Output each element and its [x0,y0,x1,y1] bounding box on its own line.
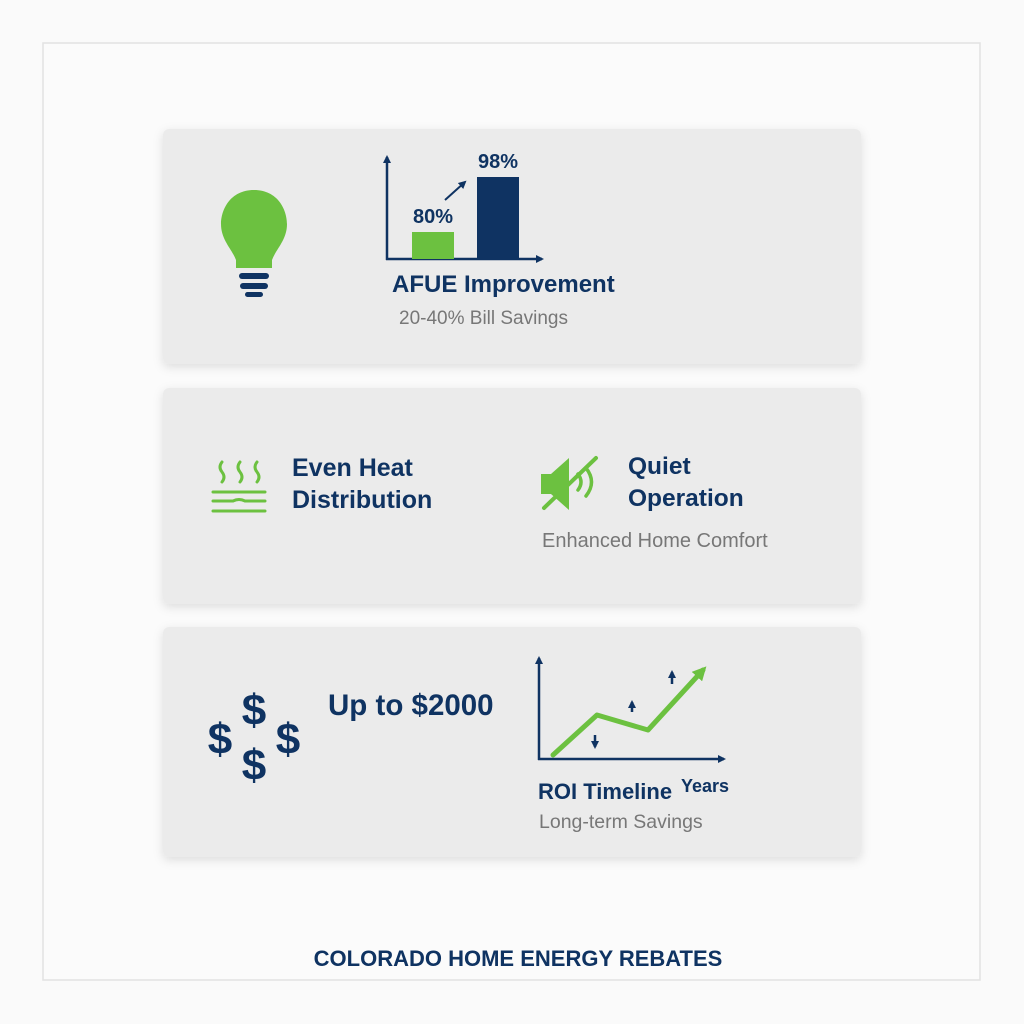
panel: rebates and ROI [163,627,861,857]
panel: comfort [163,388,861,604]
icon: dollar signs [208,686,300,790]
text: enhanced home comfort: Enhanced Home Comfort [542,530,768,552]
heading: Quiet Operation: Quiet [628,453,691,480]
icon: light bulb [221,190,287,297]
text: bill savings: 20-40% Bill Savings [399,308,568,329]
text: long-term savings: Long-term Savings [539,811,703,833]
line chart: ROI timeline [538,658,724,760]
heading: AFUE Improvement: AFUE Improvement [392,271,615,298]
heading: Quiet Operation: Operation [628,485,744,512]
icon: dollar signs: $ [242,741,266,790]
heading: Even Heat Distribution: Distribution [292,486,432,514]
icon: heat waves [213,462,265,511]
icon: muted speaker [541,458,596,510]
panel: AFUE efficiency [163,129,861,364]
icon: dollar signs: $ [242,686,266,735]
icon: dollar signs: $ [208,715,232,764]
heading: Even Heat Distribution: Even Heat [292,454,414,482]
heading: ROI Timeline: ROI Timeline [538,779,672,804]
axis label: Years: Years [681,776,729,796]
bar chart: AFUE 80% to 98% [386,151,542,260]
icon: dollar signs: $ [276,715,300,764]
bar chart: AFUE 80% to 98%: 80% [413,206,453,228]
heading: Up to $2000: Up to $2000 [328,689,494,722]
bar chart: AFUE 80% to 98%: 98% [478,151,518,173]
footer title: COLORADO HOME ENERGY REBATES [314,946,722,971]
